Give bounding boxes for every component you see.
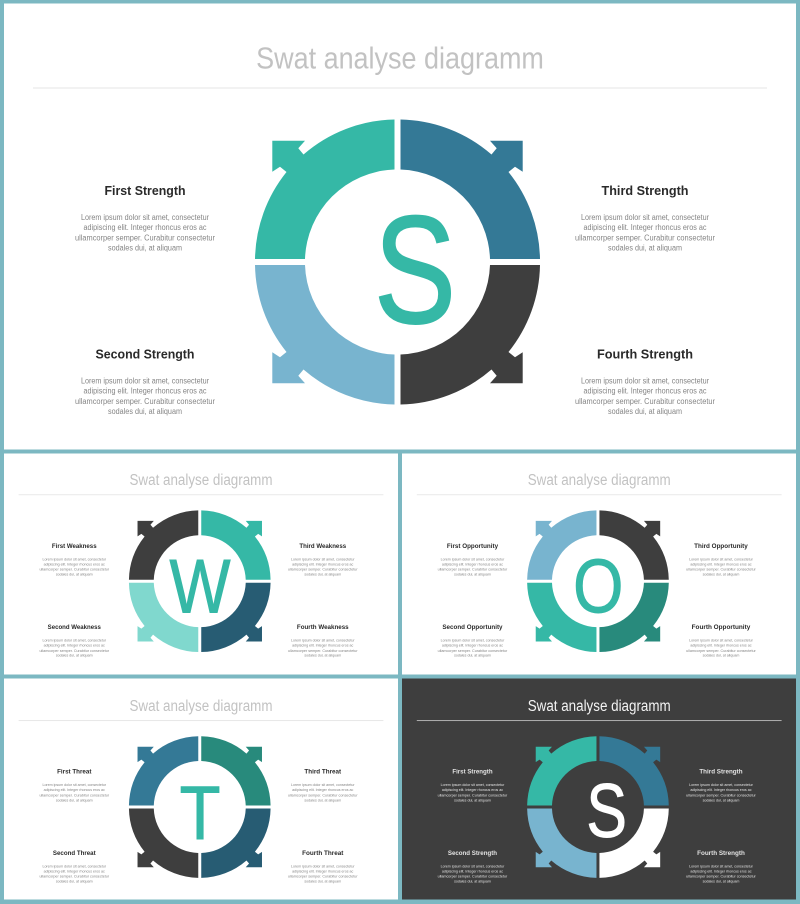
panel: main strength slide [4, 4, 796, 450]
text block: third weakness: sodales dui, at aliquam [304, 571, 341, 576]
text block: third weakness [288, 543, 358, 576]
text block: second strength: Lorem ipsum dolor sit amet, consectetur [441, 863, 505, 868]
text block: second weakness: Lorem ipsum dolor sit amet, consectetur [42, 638, 107, 643]
text block: fourth threat: sodales dui, at aliquam [304, 879, 341, 884]
text block: third strength [575, 184, 715, 252]
text block: fourth opportunity: adipiscing elit. Integer rhoncus eros ac [690, 643, 752, 648]
text block: third threat: Third Threat [304, 769, 341, 776]
text block: third opportunity: Third Opportunity [694, 543, 748, 550]
text block: fourth weakness: Lorem ipsum dolor sit amet, consectetur [291, 638, 355, 643]
text block: third strength: Third Strength [699, 769, 743, 776]
text block: second opportunity: adipiscing elit. Integer rhoncus eros ac [442, 643, 503, 648]
text block: third weakness: Third Weakness [299, 543, 347, 550]
text block: third strength: Third Strength [602, 184, 688, 198]
text block: first strength: Lorem ipsum dolor sit amet, consectetur [441, 782, 505, 787]
title: Swat analyse diagramm [256, 42, 544, 76]
title: Swat analyse diagramm [528, 472, 671, 489]
segment: third strength [400, 120, 540, 259]
text block: fourth strength: sodales dui, at aliquam [608, 407, 682, 416]
segment: third threat [201, 736, 271, 806]
text block: first strength [438, 769, 508, 802]
text block: third strength: ullamcorper semper. Curabitur consectetur [575, 234, 715, 242]
text block: second strength: Second Strength [96, 348, 194, 362]
text block: first weakness: First Weakness [52, 543, 97, 550]
text block: second strength: ullamcorper semper. Curabitur consectetur [75, 397, 215, 406]
text block: second weakness: adipiscing elit. Integer rhoncus eros ac [44, 643, 105, 648]
panel: threat slide [4, 678, 398, 900]
text block: third threat: ullamcorper semper. Curabitur consectetur [288, 792, 358, 797]
text block: first strength: ullamcorper semper. Curabitur consectetur [438, 792, 508, 797]
segment: third opportunity [599, 510, 669, 580]
text block: fourth strength: adipiscing elit. Integer rhoncus eros ac [584, 386, 707, 396]
text block: second opportunity: ullamcorper semper. Curabitur consectetur [438, 648, 508, 653]
text block: fourth weakness: adipiscing elit. Integer rhoncus eros ac [292, 643, 353, 648]
segment: second strength [255, 265, 394, 404]
segment: fourth threat [201, 809, 271, 878]
text block: fourth strength: ullamcorper semper. Curabitur consectetur [686, 874, 756, 879]
title: Swat analyse diagramm [129, 472, 273, 489]
text block: second opportunity: Second Opportunity [442, 624, 503, 631]
text block: third opportunity [686, 543, 756, 576]
segment: fourth weakness [201, 583, 271, 652]
text block: first strength: First Strength [452, 769, 493, 776]
text block: fourth strength: Fourth Strength [697, 850, 745, 857]
text block: fourth threat: adipiscing elit. Integer rhoncus eros ac [292, 868, 353, 873]
text block: fourth opportunity: sodales dui, at aliquam [703, 653, 739, 658]
panel: dark strength slide [402, 678, 796, 900]
text block: first weakness: ullamcorper semper. Curabitur consectetur [39, 567, 110, 572]
text block: first strength: adipiscing elit. Integer rhoncus eros ac [442, 787, 503, 792]
letter S: S [586, 769, 627, 854]
text block: first opportunity: adipiscing elit. Integer rhoncus eros ac [442, 561, 503, 566]
letter O: O [573, 544, 623, 629]
segment: fourth strength [400, 265, 540, 404]
text block: fourth opportunity: Fourth Opportunity [692, 624, 751, 631]
text block: fourth strength: ullamcorper semper. Curabitur consectetur [575, 397, 715, 406]
text block: fourth opportunity: ullamcorper semper. Curabitur consectetur [686, 648, 756, 653]
text block: second strength: sodales dui, at aliquam [454, 879, 491, 884]
text block: fourth threat: Fourth Threat [302, 850, 343, 857]
text block: fourth weakness: Fourth Weakness [297, 624, 349, 631]
text block: first strength: sodales dui, at aliquam [108, 244, 182, 252]
text block: third opportunity: ullamcorper semper. Curabitur consectetur [686, 567, 756, 572]
text block: first weakness [39, 543, 110, 576]
text block: first weakness: sodales dui, at aliquam [56, 571, 93, 576]
text block: third strength: ullamcorper semper. Curabitur consectetur [686, 792, 756, 797]
letter S: S [374, 186, 456, 356]
text block: first strength: adipiscing elit. Integer rhoncus eros ac [84, 223, 207, 232]
text block: second weakness: ullamcorper semper. Curabitur consectetur [39, 648, 110, 653]
text block: second strength: sodales dui, at aliquam [108, 407, 182, 416]
text block: fourth weakness: ullamcorper semper. Curabitur consectetur [288, 648, 358, 653]
text block: fourth opportunity: Lorem ipsum dolor sit amet, consectetur [689, 638, 753, 643]
text block: second threat [39, 850, 110, 884]
text block: fourth strength [686, 850, 756, 884]
text block: third threat: adipiscing elit. Integer rhoncus eros ac [292, 787, 353, 792]
text block: fourth opportunity [686, 624, 756, 658]
letter W: W [170, 544, 231, 629]
text block: third threat [288, 769, 358, 802]
text block: fourth strength: adipiscing elit. Integer rhoncus eros ac [690, 868, 752, 873]
text block: third strength [686, 769, 756, 802]
text block: first strength [75, 184, 215, 252]
text block: third strength: adipiscing elit. Integer rhoncus eros ac [584, 223, 707, 232]
text block: fourth strength: Lorem ipsum dolor sit amet, consectetur [581, 376, 709, 386]
segment: second strength [527, 809, 596, 878]
text block: fourth strength: sodales dui, at aliquam [703, 879, 739, 884]
segment: first opportunity [527, 510, 596, 580]
text block: fourth strength: Fourth Strength [597, 348, 693, 362]
text block: second strength: adipiscing elit. Integer rhoncus eros ac [442, 868, 503, 873]
circular diagram: weakness [129, 510, 271, 652]
text block: second weakness [39, 624, 110, 658]
text block: second threat: adipiscing elit. Integer rhoncus eros ac [44, 868, 105, 873]
segment: second opportunity [527, 583, 596, 652]
text block: first strength: ullamcorper semper. Curabitur consectetur [75, 234, 215, 242]
letter T: T [180, 771, 220, 856]
text block: second threat: Second Threat [53, 850, 96, 857]
text block: first opportunity: First Opportunity [447, 543, 499, 550]
text block: third opportunity: Lorem ipsum dolor sit amet, consectetur [689, 556, 753, 561]
segment: first strength [527, 736, 596, 806]
text block: second strength [75, 348, 215, 416]
text block: third strength: Lorem ipsum dolor sit amet, consectetur [581, 213, 709, 222]
circular diagram: dark strength [527, 736, 669, 878]
text block: third threat: sodales dui, at aliquam [304, 797, 341, 802]
text block: first opportunity: ullamcorper semper. Curabitur consectetur [438, 567, 508, 572]
text block: fourth threat: Lorem ipsum dolor sit amet, consectetur [291, 863, 355, 868]
segment: fourth opportunity [599, 583, 669, 652]
text block: first opportunity: sodales dui, at aliquam [454, 571, 491, 576]
text block: third weakness: Lorem ipsum dolor sit amet, consectetur [291, 556, 355, 561]
text block: first threat: adipiscing elit. Integer rhoncus eros ac [44, 787, 105, 792]
text block: fourth weakness: sodales dui, at aliquam [304, 653, 341, 658]
text block: third weakness: adipiscing elit. Integer rhoncus eros ac [292, 561, 353, 566]
segment: third strength [599, 736, 669, 806]
text block: first opportunity [438, 543, 508, 576]
text block: first threat: sodales dui, at aliquam [56, 797, 93, 802]
text block: fourth strength [575, 348, 715, 416]
text block: third opportunity: sodales dui, at aliquam [703, 571, 739, 576]
text block: first strength: Lorem ipsum dolor sit amet, consectetur [81, 213, 209, 222]
text block: first weakness: adipiscing elit. Integer rhoncus eros ac [44, 561, 105, 566]
segment: second weakness [129, 583, 198, 652]
text block: second strength: ullamcorper semper. Curabitur consectetur [438, 874, 508, 879]
text block: first threat [39, 769, 110, 802]
segment: first strength [255, 120, 394, 259]
text block: first threat: First Threat [57, 769, 91, 776]
text block: second threat: ullamcorper semper. Curabitur consectetur [39, 874, 110, 879]
segment: third weakness [201, 510, 271, 580]
circular diagram: threat [129, 736, 271, 878]
text block: second weakness: Second Weakness [48, 624, 101, 631]
text block: second threat: Lorem ipsum dolor sit amet, consectetur [42, 863, 107, 868]
text block: second opportunity: sodales dui, at aliquam [454, 653, 491, 658]
segment: first weakness [129, 510, 198, 580]
segment: second threat [129, 809, 198, 878]
text block: first weakness: Lorem ipsum dolor sit amet, consectetur [42, 556, 107, 561]
text block: second strength: Lorem ipsum dolor sit amet, consectetur [81, 376, 209, 386]
text block: first threat: ullamcorper semper. Curabitur consectetur [39, 792, 110, 797]
text block: second weakness: sodales dui, at aliquam [56, 653, 93, 658]
text block: second opportunity [438, 624, 508, 658]
text block: third strength: sodales dui, at aliquam [703, 797, 739, 802]
text block: fourth threat: ullamcorper semper. Curabitur consectetur [288, 874, 358, 879]
text block: second opportunity: Lorem ipsum dolor sit amet, consectetur [441, 638, 505, 643]
text block: first strength: sodales dui, at aliquam [454, 797, 491, 802]
circular diagram: strength [255, 120, 540, 404]
segment: first threat [129, 736, 198, 806]
text block: first threat: Lorem ipsum dolor sit amet, consectetur [42, 782, 107, 787]
text block: second strength [438, 850, 508, 884]
text block: first strength: First Strength [104, 184, 186, 198]
text block: third strength: Lorem ipsum dolor sit amet, consectetur [689, 782, 753, 787]
text block: third strength: sodales dui, at aliquam [608, 244, 682, 252]
text block: second strength: Second Strength [448, 850, 497, 857]
text block: fourth weakness [288, 624, 358, 658]
text block: second strength: adipiscing elit. Integer rhoncus eros ac [84, 386, 207, 396]
text block: fourth threat [288, 850, 358, 884]
text block: second threat: sodales dui, at aliquam [56, 879, 93, 884]
panel: opportunity slide [402, 454, 796, 674]
text block: third weakness: ullamcorper semper. Curabitur consectetur [288, 567, 358, 572]
title: Swat analyse diagramm [129, 698, 273, 715]
text block: first opportunity: Lorem ipsum dolor sit amet, consectetur [441, 556, 505, 561]
text block: fourth strength: Lorem ipsum dolor sit amet, consectetur [689, 863, 753, 868]
panel: weakness slide [4, 454, 398, 674]
text block: third strength: adipiscing elit. Integer rhoncus eros ac [690, 787, 752, 792]
title: Swat analyse diagramm [528, 698, 671, 715]
text block: third opportunity: adipiscing elit. Integer rhoncus eros ac [690, 561, 752, 566]
segment: fourth strength [599, 809, 669, 878]
circular diagram: opportunity [527, 510, 669, 652]
text block: third threat: Lorem ipsum dolor sit amet, consectetur [291, 782, 355, 787]
